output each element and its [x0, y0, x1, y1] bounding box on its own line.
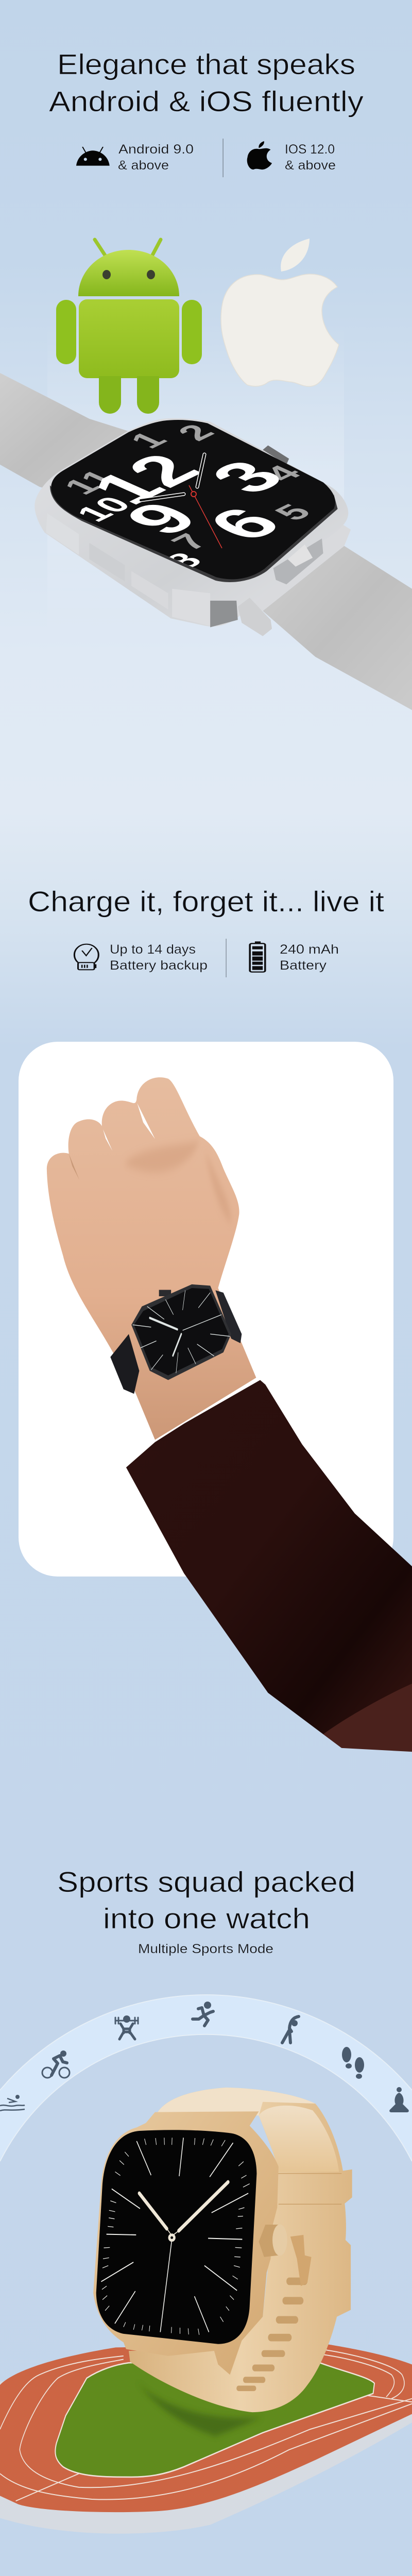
watch face numerals: 3 [192, 452, 302, 502]
text: battery backup: Up to 14 days [110, 942, 196, 957]
panel: sports [0, 1866, 412, 2534]
heading: charge: Charge it, forget it... live it [28, 885, 384, 918]
watch shadow [136, 2382, 263, 2436]
white photo card [19, 1042, 393, 1577]
strap holes [236, 2278, 307, 2391]
track base [0, 2364, 412, 2534]
soft light band behind watch [47, 319, 344, 639]
panel: compatibility [0, 48, 412, 710]
illustration: silver smartwatch [0, 373, 412, 710]
text: battery backup [110, 942, 208, 973]
icon: yoga [389, 2087, 409, 2112]
black watch [110, 1284, 242, 1394]
running track [0, 2344, 412, 2512]
icon: 3d apple [221, 239, 339, 386]
illustration: gold watch on running track [0, 2088, 412, 2534]
watch face numerals: 12 [72, 445, 218, 513]
crown [259, 2224, 287, 2257]
heading: elegance: Elegance that speaks [57, 48, 355, 80]
icon: android small [76, 147, 110, 166]
icon: stretching [282, 2016, 299, 2043]
watch face numerals: 1 [121, 428, 176, 453]
watch face numerals: 11 [55, 466, 126, 499]
illustration: hand wearing black watch [47, 1077, 412, 1752]
icon: running [193, 2002, 213, 2026]
icon: weightlifting [115, 2015, 138, 2039]
watch screen [51, 420, 335, 579]
grass infield [55, 2361, 374, 2477]
watch face numerals: 9 [107, 493, 216, 544]
heading: sports squad: Sports squad packed [57, 1866, 355, 1898]
gold strap [129, 2088, 352, 2412]
gold case [93, 2111, 279, 2375]
watch face numerals: 6 [189, 499, 299, 549]
sleeve [126, 1380, 412, 1752]
watch face numerals: 7 [162, 529, 217, 554]
heading: elegance [49, 48, 364, 117]
icon: battery backup clock [74, 944, 98, 970]
icon: 3d android robot [56, 240, 202, 414]
watch face numerals: 10 [67, 492, 140, 526]
watch face [96, 2130, 256, 2344]
text: subheading: Multiple Sports Mode [138, 1942, 273, 1956]
icon: battery [250, 941, 265, 972]
heading: elegance: Android & iOS fluently [49, 85, 364, 117]
hand [47, 1077, 256, 1440]
text: battery capacity: Battery [280, 958, 327, 973]
face minute ticks [102, 2138, 250, 2335]
text: ios version: & above [285, 158, 336, 173]
text: battery capacity: 240 mAh [280, 942, 339, 957]
panel: battery [19, 885, 412, 1752]
watch face numerals: 5 [265, 500, 320, 525]
watch face numerals [67, 425, 308, 567]
watch straps [0, 373, 412, 710]
watch face numerals: 4 [255, 461, 310, 486]
icon: apple small [247, 141, 272, 170]
text: ios version: IOS 12.0 [285, 142, 335, 157]
watch face numerals: 2 [168, 420, 223, 445]
icon: footsteps [342, 2047, 364, 2079]
icon: cycling [42, 2050, 70, 2078]
heading: sports squad [57, 1866, 355, 1935]
text: battery capacity [280, 942, 339, 973]
arc band of sports icons [0, 1995, 412, 2161]
face hour markers [101, 2138, 248, 2332]
watch case [35, 418, 351, 636]
text: ios version [285, 142, 336, 173]
track lanes [0, 2349, 412, 2501]
text: android version: Android 9.0 [118, 142, 194, 157]
text: battery backup: Battery backup [110, 958, 208, 973]
heading: sports squad: into one watch [103, 1902, 310, 1935]
text: android version [118, 142, 194, 173]
watch face numerals: 8 [157, 548, 211, 573]
text: android version: & above [118, 158, 169, 173]
gold watch hands [139, 2182, 228, 2242]
watch hands [141, 454, 222, 548]
icon: swimming [0, 2095, 25, 2111]
